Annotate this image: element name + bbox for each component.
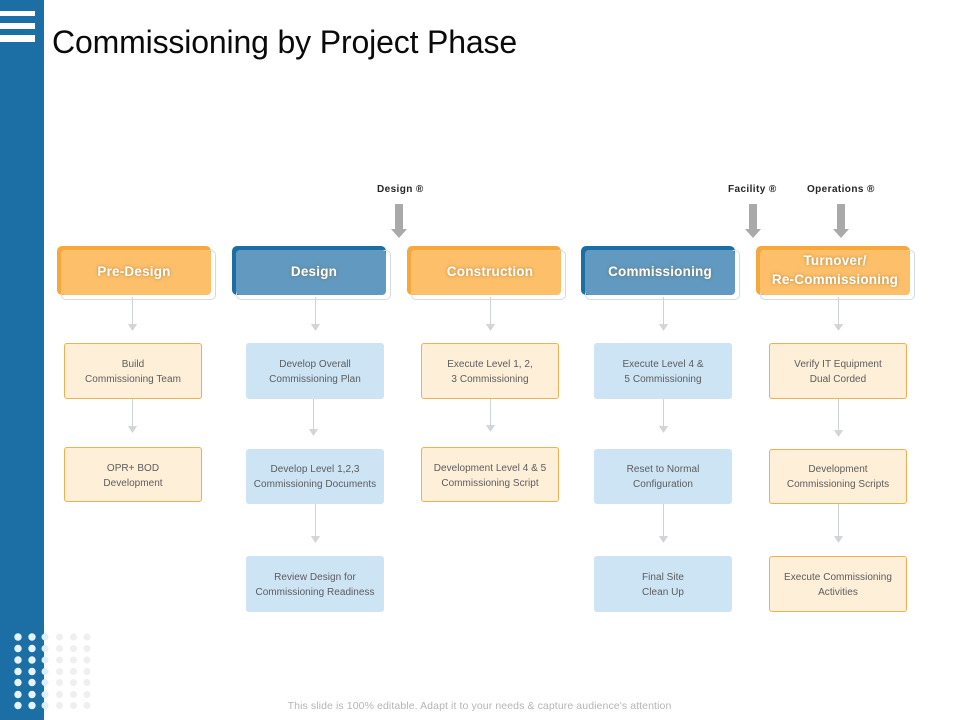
box: Review Design for Commissioning Readiness: Review Design for: [274, 572, 356, 583]
box: Reset to Normal Configuration: [594, 449, 732, 504]
box: Build Commissioning Team: Build: [122, 359, 144, 370]
box: Execute Level 1, 2, 3 Commissioning: Execute Level 1, 2,: [447, 359, 533, 370]
header: Design: [232, 246, 391, 300]
box: Review Design for Commissioning Readiness: Commissioning Readiness: [255, 587, 375, 598]
box: Development Level 4 & 5 Commissioning Script: Commissioning Script: [441, 478, 539, 488]
box: Develop Level 1,2,3 Commissioning Documents: Commissioning Documents: [254, 478, 376, 490]
box: Build Commissioning Team: [64, 343, 202, 399]
box: OPR+ BOD Development: [64, 447, 202, 502]
box: Verify IT Equipment Dual Corded: Dual Corded: [810, 374, 866, 385]
sidebar: [0, 0, 44, 720]
header: Turnover / Re-Commissioning: Turnover/: [803, 252, 867, 268]
box: Development Level 4 & 5 Commissioning Script: Development Level 4 & 5: [434, 462, 546, 474]
box: Develop Overall Commissioning Plan: [246, 343, 384, 399]
box: Build Commissioning Team: Commissioning Team: [85, 374, 181, 385]
title: Commissioning by Project Phase: [52, 24, 517, 60]
header: Commissioning: [581, 246, 740, 300]
box: Develop Level 1,2,3 Commissioning Documents: Develop Level 1,2,3: [271, 464, 359, 474]
label: Design: Design ®: [377, 184, 424, 195]
header: Pre-Design: [57, 246, 216, 300]
arrow: Facility down: [745, 204, 761, 238]
header: Turnover / Re-Commissioning: Re-Commissioning: [772, 272, 898, 286]
label: Facility: Facility ®: [728, 184, 777, 195]
box: Review Design for Commissioning Readiness: [246, 556, 384, 612]
box: Execute Level 4 & 5 Commissioning: [594, 343, 732, 399]
box: OPR+ BOD Development: OPR+ BOD: [107, 462, 159, 474]
header: Design: Design: [291, 264, 337, 279]
footer note: This slide is 100% editable. Adapt it to your needs & capture audience's attention: [288, 700, 671, 712]
box: Execute Level 4 & 5 Commissioning: 5 Commissioning: [624, 374, 702, 385]
arrow: Operations down: [833, 204, 849, 238]
dot pattern: [14, 633, 90, 710]
label: Operations: Operations ®: [807, 184, 875, 195]
box: Final Site Clean Up: Final Site: [642, 572, 684, 583]
icon: menu bars: [0, 11, 35, 42]
box: OPR+ BOD Development: Development: [103, 478, 163, 488]
box: Final Site Clean Up: [594, 556, 732, 612]
header: Turnover / Re-Commissioning: [756, 246, 915, 300]
box: Verify IT Equipment Dual Corded: [769, 343, 907, 399]
box: Development Level 4 & 5 Commissioning Script: [421, 447, 559, 502]
box: Development Commissioning Scripts: [769, 449, 907, 504]
box: Development Commissioning Scripts: Development: [808, 464, 868, 474]
box: Execute Commissioning Activities: Activities: [818, 587, 858, 598]
box: Develop Overall Commissioning Plan: Develop Overall: [279, 359, 351, 370]
header: Pre-Design: Pre-Design: [97, 264, 171, 279]
header: Construction: Construction: [447, 264, 533, 279]
box: Execute Commissioning Activities: [769, 556, 907, 612]
box: Execute Level 4 & 5 Commissioning: Execute Level 4 &: [622, 359, 704, 370]
box: Develop Overall Commissioning Plan: Commissioning Plan: [269, 374, 361, 385]
box: Execute Level 1, 2, 3 Commissioning: [421, 343, 559, 399]
box: Reset to Normal Configuration: Configuration: [633, 478, 693, 490]
box: Reset to Normal Configuration: Reset to Normal: [627, 464, 699, 474]
box: Final Site Clean Up: Clean Up: [642, 587, 684, 598]
header: Construction: [407, 246, 566, 300]
box: Develop Level 1,2,3 Commissioning Documents: [246, 449, 384, 504]
header: Commissioning: Commissioning: [608, 264, 712, 279]
arrow: Design down: [391, 204, 407, 238]
box: Verify IT Equipment Dual Corded: Verify IT Equipment: [794, 359, 882, 370]
box: Execute Level 1, 2, 3 Commissioning: 3 Commissioning: [451, 374, 529, 385]
box: Execute Commissioning Activities: Execute Commissioning: [784, 572, 892, 583]
box: Development Commissioning Scripts: Commissioning Scripts: [787, 478, 889, 490]
